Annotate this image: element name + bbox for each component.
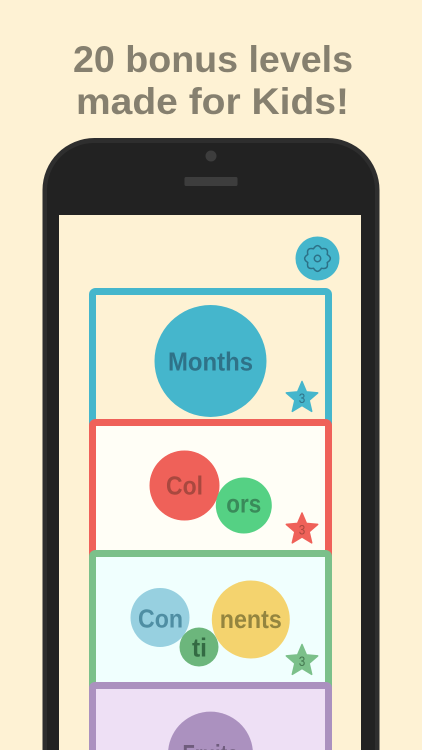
circle: Col <box>150 450 220 520</box>
camera <box>206 150 216 162</box>
circle: Months: Months <box>168 346 253 376</box>
card: Months <box>92 292 328 432</box>
star badge: 3 <box>286 644 318 674</box>
title: 20 bonus levels <box>73 39 353 80</box>
title <box>73 39 353 122</box>
settings button <box>296 236 340 280</box>
circle: Con: Con <box>138 604 183 634</box>
circle: Col: Col <box>166 470 203 500</box>
phone screen <box>59 215 361 750</box>
title: made for Kids! <box>76 81 349 122</box>
card: Colors <box>92 422 328 562</box>
star badge: 3 <box>286 513 318 543</box>
circle: ors <box>216 478 272 534</box>
card: Fruits <box>89 682 332 750</box>
star badge: 3: 3 <box>299 522 305 538</box>
card: Continents <box>92 554 328 694</box>
circle: Fruits <box>168 712 253 750</box>
circle: ti <box>180 628 218 666</box>
circle: nents: nents <box>220 604 282 634</box>
icon: gear <box>305 246 330 271</box>
phone body <box>42 138 380 750</box>
circle: ti: ti <box>192 632 207 662</box>
star badge: 3: 3 <box>299 390 305 406</box>
circle: Months <box>154 305 266 417</box>
star badge: 3: 3 <box>299 653 305 669</box>
circle: nents <box>212 580 290 658</box>
circle: ors: ors <box>226 488 261 518</box>
speaker <box>184 177 238 186</box>
circle: Con <box>130 588 190 647</box>
star badge: 3 <box>286 382 318 411</box>
